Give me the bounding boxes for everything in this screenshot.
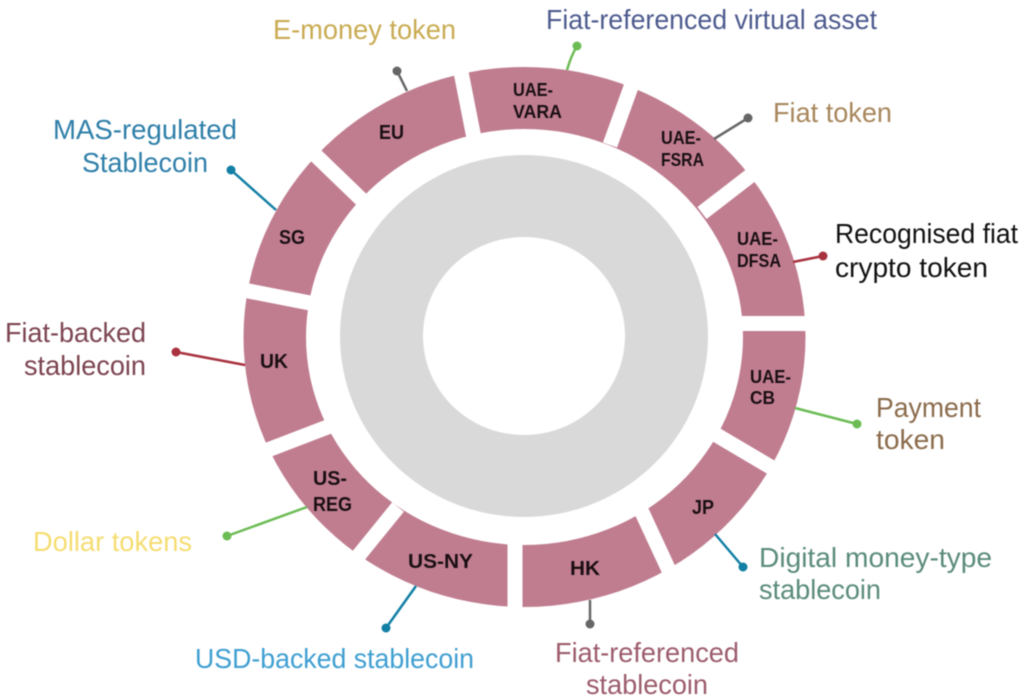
callout: Payment token: Payment (876, 392, 981, 423)
callout: Recognised fiat crypto token: Recognised fiat (835, 218, 1018, 249)
callout: MAS-regulated Stablecoin: MAS-regulated (53, 114, 237, 145)
callout: E-money token: E-money token (273, 14, 456, 45)
segment label: UAE-CB: UAE- (750, 367, 791, 387)
segment label: UAE-VARA: VARA (513, 102, 562, 122)
callout: Recognised fiat crypto token (835, 218, 1018, 283)
segment label: UAE-FSRA: FSRA (661, 150, 704, 170)
callout: Dollar tokens: Dollar tokens (33, 526, 192, 557)
callout: Digital money-type stablecoin: Digital money-type (759, 542, 992, 573)
callout: Fiat-backed stablecoin (5, 317, 146, 381)
segment label: UAE-CB (750, 367, 791, 408)
leader: Dollar tokens (222, 507, 307, 540)
segment label: UAE-VARA: UAE- (513, 80, 553, 100)
segment label: JP: JP (692, 497, 714, 519)
central grey ring (340, 155, 708, 517)
callout: Payment token (876, 392, 981, 455)
callout: Fiat-backed stablecoin: Fiat-backed (5, 317, 146, 348)
leader: Payment token (795, 408, 862, 428)
segment label: UAE-CB: CB (750, 388, 775, 408)
callout: Fiat token: Fiat token (773, 97, 892, 128)
segment label: SG: SG (279, 227, 305, 249)
segment label: US-NY: US-NY (408, 551, 474, 573)
callout: Fiat-backed stablecoin: stablecoin (24, 350, 146, 381)
callout: Digital money-type stablecoin: stablecoin (759, 574, 881, 605)
leader: Fiat token (714, 114, 752, 139)
leader: MAS-regulated Stablecoin (226, 166, 276, 210)
callout: Fiat-referenced stablecoin: Fiat-referenced (555, 637, 739, 668)
segment label: UAE-FSRA (661, 128, 704, 170)
leader: Recognised fiat crypto token (793, 252, 828, 262)
leader: Fiat-referenced stablecoin (586, 600, 594, 628)
segment label: UAE-FSRA: UAE- (661, 128, 701, 148)
segment label: EU: EU (379, 122, 404, 144)
segment label: UAE-VARA (513, 80, 562, 122)
callout: Recognised fiat crypto token: crypto token (835, 252, 988, 283)
segment label: US-REG: US- (313, 468, 347, 490)
leader: E-money token (392, 66, 407, 91)
callout: Digital money-type stablecoin (759, 542, 992, 605)
leader: Digital money-type stablecoin (715, 534, 748, 572)
leader: USD-backed stablecoin (382, 586, 416, 632)
callout: USD-backed stablecoin: USD-backed stablecoin (195, 643, 474, 674)
segment label: US-REG (313, 468, 352, 516)
outer jurisdiction ring (244, 67, 806, 607)
callout: Payment token: token (876, 424, 945, 455)
leader: Fiat-referenced virtual asset (567, 42, 582, 70)
segment label: UAE-DFSA: DFSA (737, 251, 781, 271)
leader: Fiat-backed stablecoin (172, 348, 245, 365)
segment label: UAE-DFSA (737, 229, 781, 271)
callout: Fiat-referenced virtual asset: Fiat-referenced virtual asset (546, 4, 877, 35)
segment label: UK: UK (260, 351, 289, 373)
callout: MAS-regulated Stablecoin (53, 114, 237, 178)
callout: MAS-regulated Stablecoin: Stablecoin (82, 147, 208, 178)
callout: Fiat-referenced stablecoin (555, 637, 739, 698)
segment label: US-REG: REG (313, 494, 352, 516)
segment label: UAE-DFSA: UAE- (737, 229, 778, 249)
segment label: HK: HK (570, 558, 601, 580)
